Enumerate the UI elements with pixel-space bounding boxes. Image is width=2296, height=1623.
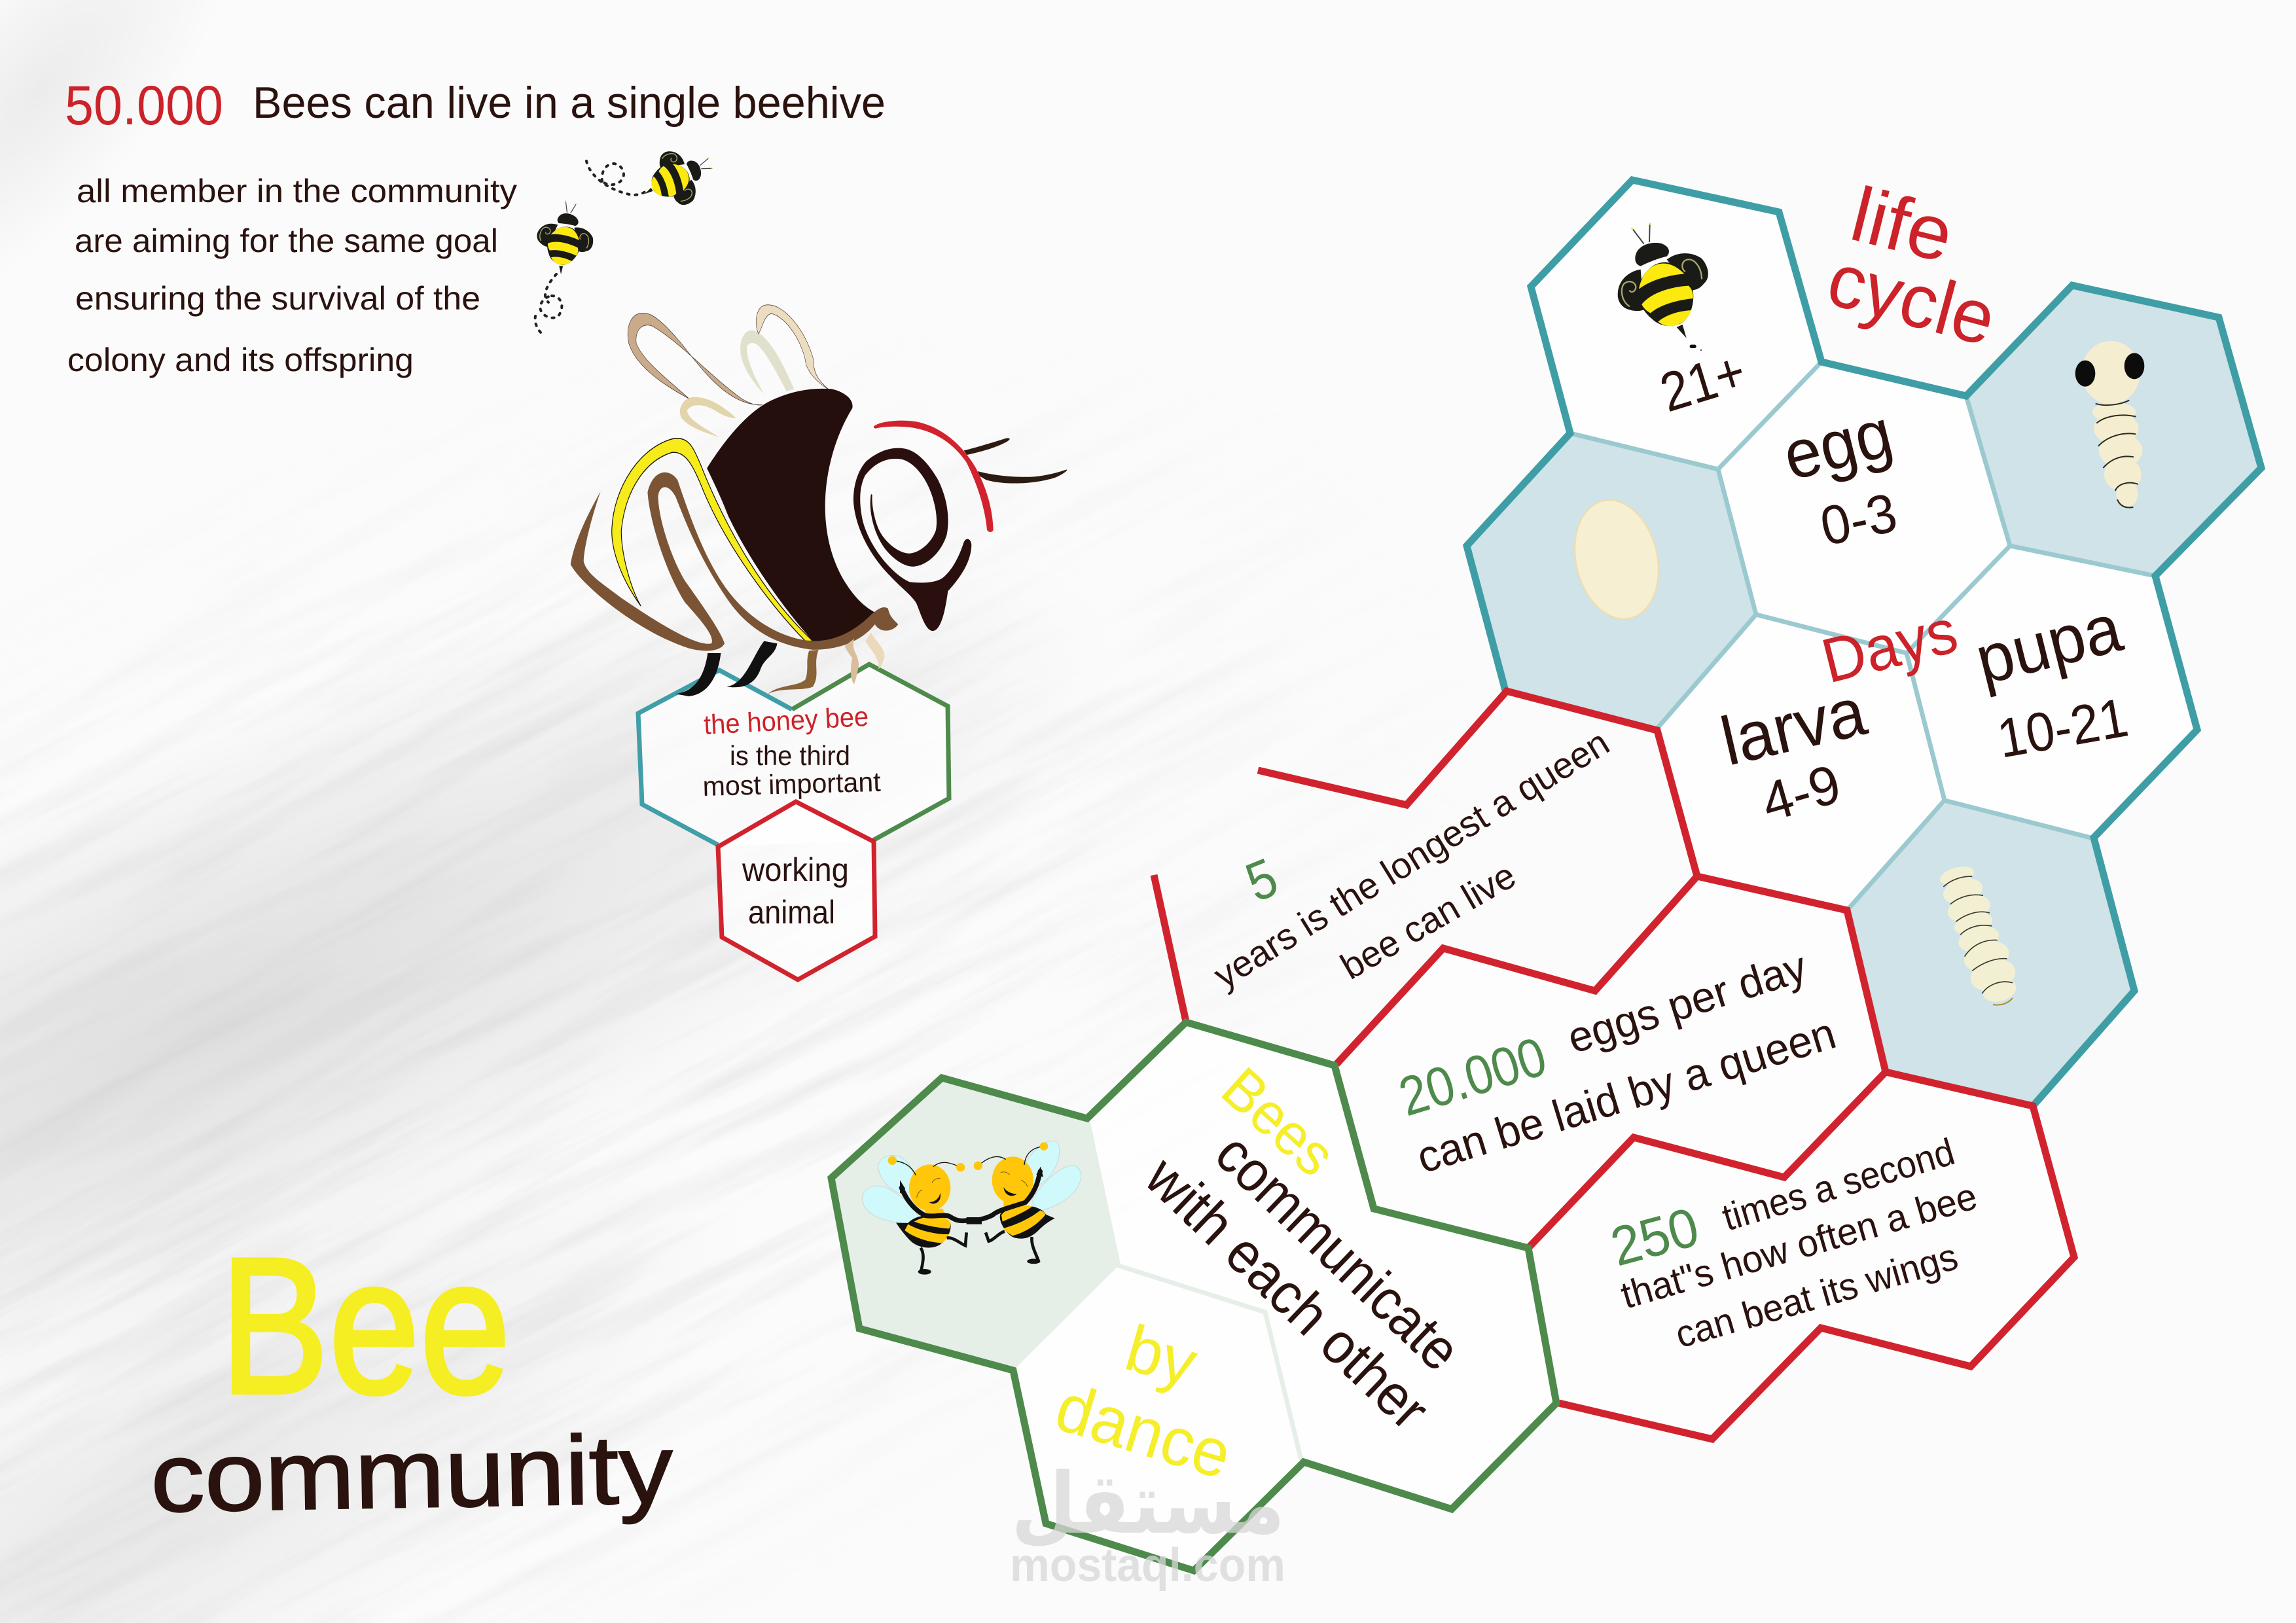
icon: small bee flying right with dotted trail	[586, 149, 715, 207]
antennae	[964, 438, 1067, 484]
hexagon text: working animal: animal	[748, 894, 835, 931]
illustration: large stylised bee	[571, 305, 1067, 696]
hexagon outline	[1467, 180, 2261, 1106]
text block: colony goal: ensuring the survival of the	[75, 280, 480, 317]
yellow abdomen stripe	[612, 438, 813, 641]
panel: communication honeycomb	[831, 1022, 1556, 1571]
hexagon fills	[831, 1022, 1556, 1571]
hexagon text: working animal: working	[742, 851, 849, 888]
label: pupa 10-21: pupa	[1968, 589, 2129, 699]
text block: colony goal: colony and its offspring	[67, 342, 414, 378]
fact: 20.000 eggs: 20.000	[1392, 1025, 1553, 1128]
heading: life cycle: life	[1843, 171, 1962, 279]
fact: 20.000 eggs: eggs per day	[1562, 942, 1812, 1062]
wing: small light	[680, 397, 736, 437]
icon: pupa	[1938, 863, 2019, 1005]
heading: life cycle	[1820, 171, 2004, 362]
hexagon separators	[1570, 362, 2155, 910]
brown legs and underside	[571, 473, 898, 651]
text block: colony goal: all member in the community	[77, 173, 517, 209]
title: Bee community	[150, 1217, 673, 1533]
fact: 250 wing beats	[1604, 1130, 1982, 1356]
bee head	[853, 421, 1067, 631]
hexagon: red	[718, 802, 875, 980]
light foot	[865, 632, 884, 669]
black foot	[675, 653, 721, 696]
icon: larva with eyes	[2075, 341, 2144, 508]
text: by dance: by	[1118, 1311, 1205, 1400]
wing: tan	[628, 313, 762, 405]
fact: 5 years: bee can live	[1334, 854, 1522, 987]
green hexagon outline	[831, 1022, 1556, 1571]
fact: 250 wing beats: that"s how often a bee	[1617, 1175, 1982, 1317]
panel: queen and wing facts	[1154, 691, 2074, 1439]
red brow	[874, 421, 994, 532]
hexagon text: honey bee: is the third	[730, 740, 850, 771]
fact: 250 wing beats: 250	[1604, 1196, 1705, 1277]
dark thorax	[707, 389, 875, 641]
heading: 50.000 bees statistic: 50.000	[65, 75, 223, 136]
hexagon separators	[1087, 1118, 1301, 1460]
fact: 20.000 eggs: can be laid by a queen	[1411, 1008, 1841, 1183]
fact: 20.000 eggs	[1392, 942, 1841, 1183]
hexagon: teal and green	[638, 664, 949, 846]
title: Bee community: community	[150, 1414, 673, 1533]
tan foot	[845, 639, 859, 685]
paper background	[0, 0, 1175, 1623]
text: bees communicate with each other: with each other	[1133, 1143, 1442, 1442]
label: pupa 10-21	[1968, 589, 2132, 770]
hexagon text: honey bee: most important	[702, 766, 881, 802]
black foot	[726, 641, 777, 687]
fact: 5 years: 5	[1238, 846, 1286, 914]
label: Days: Days	[1815, 596, 1964, 696]
label: adult 21+: 21+	[1653, 340, 1753, 423]
icon: small bee flying up with dotted trail	[525, 194, 607, 336]
wing: peach	[756, 305, 830, 391]
fact: 5 years: years is the longest a queen	[1206, 721, 1616, 996]
hexagon fills	[1467, 180, 2261, 1106]
heading: life cycle: cycle	[1820, 236, 2004, 362]
heading: 50.000 bees statistic: Bees can live in a single beehive	[253, 78, 886, 128]
heading: 50.000 bees statistic	[65, 75, 886, 136]
fact: 250 wing beats: times a second	[1717, 1130, 1960, 1239]
text: by dance	[1047, 1311, 1240, 1494]
label: egg 0-3	[1776, 395, 1902, 558]
hexagon text: honey bee	[702, 701, 881, 802]
brown foot	[768, 650, 819, 694]
label: larva 4-9: 4-9	[1755, 753, 1847, 833]
fact: 250 wing beats: can beat its wings	[1671, 1235, 1962, 1356]
icon: adult bee	[1618, 223, 1708, 351]
watermark: mostaql: مستقل	[1011, 1455, 1285, 1553]
title: Bee community: Bee	[220, 1217, 511, 1434]
text: bees communicate with each other: communicate	[1204, 1120, 1473, 1383]
watermark: mostaql	[1010, 1455, 1285, 1592]
wing: pale	[740, 330, 794, 394]
watermark: mostaql: mostaql.com	[1010, 1539, 1285, 1592]
label: pupa 10-21: 10-21	[1993, 686, 2132, 770]
label: egg 0-3: 0-3	[1815, 482, 1902, 558]
text: by dance: dance	[1047, 1369, 1240, 1494]
text: bees communicate with each other: Bees	[1210, 1056, 1348, 1189]
hexagon text: working animal	[742, 851, 849, 931]
icon: two dancing bees	[862, 1141, 1081, 1275]
panel: life cycle honeycomb	[1467, 171, 2261, 1106]
label: larva 4-9	[1714, 673, 1873, 833]
label: egg 0-3: egg	[1776, 395, 1900, 495]
panel: honey bee hexagons	[638, 664, 949, 980]
red hexagon outlines	[1154, 691, 2074, 1439]
text block: colony goal	[67, 173, 517, 378]
icon: egg	[1564, 491, 1670, 628]
head spiral	[853, 448, 971, 631]
hexagon text: honey bee: the honey bee	[703, 701, 869, 740]
label: larva 4-9: larva	[1714, 673, 1873, 780]
text block: colony goal: are aiming for the same goal	[75, 223, 498, 259]
